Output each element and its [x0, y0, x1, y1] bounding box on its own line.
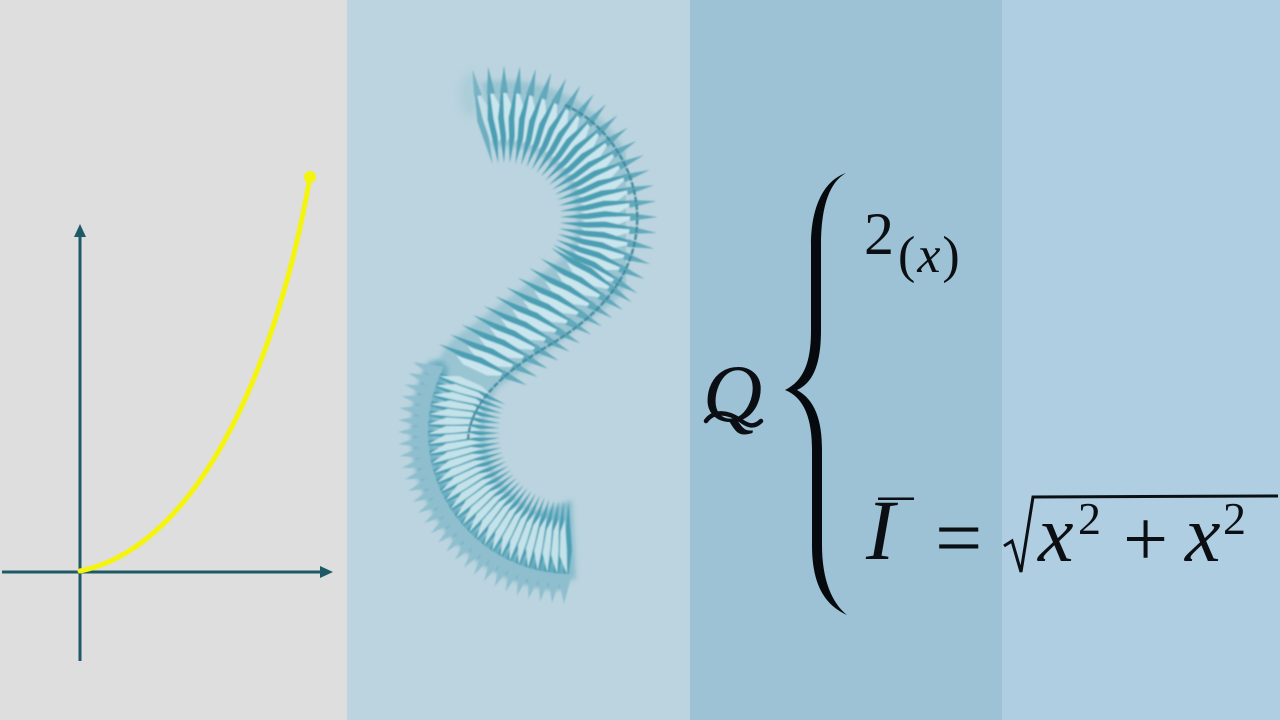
- upper arc spikes: [467, 66, 657, 309]
- radicand x squared plus x squared: +: [1123, 496, 1168, 584]
- first case: 2 sub (x): 2: [864, 201, 894, 267]
- middle transition spikes: [435, 253, 626, 392]
- radicand x squared plus x squared: 2: [1223, 493, 1246, 544]
- lower arc spikes: [398, 355, 575, 604]
- formula: cases expression: [703, 173, 1278, 615]
- script Q symbol: Q: [703, 348, 762, 439]
- first case: 2 sub (x): (x): [898, 227, 962, 284]
- panel: formula background: [690, 0, 1002, 720]
- panel: graph background: [0, 0, 347, 720]
- horizontal axis arrow: [2, 566, 333, 578]
- I with bar: [865, 482, 914, 578]
- curve end point: [304, 171, 316, 183]
- thin spine line: [468, 105, 637, 440]
- radical sign: [1004, 496, 1278, 572]
- equals sign: =: [935, 492, 982, 585]
- radicand x squared plus x squared: 2: [1078, 493, 1101, 544]
- radicand x squared plus x squared: x: [1184, 491, 1221, 579]
- radicand x squared plus x squared: [1037, 491, 1246, 584]
- first case: 2 sub (x): [864, 201, 962, 284]
- I with bar: I: [865, 482, 898, 578]
- radicand x squared plus x squared: x: [1037, 491, 1074, 579]
- large curly brace: [785, 173, 847, 615]
- panel: spiral background: [347, 0, 690, 720]
- illustration: spiked S-shaped ribbon: [398, 66, 657, 604]
- lower band shading: [423, 372, 576, 580]
- panel: right background: [1002, 0, 1280, 720]
- ribbon body shading: [452, 113, 610, 550]
- yellow growth curve: [80, 177, 310, 571]
- chart: axes with yellow curve: [2, 171, 333, 661]
- vertical axis arrow: [74, 224, 86, 661]
- faded smudge at ribbon end: [460, 73, 480, 117]
- second case: I bar equals root: [865, 482, 1278, 585]
